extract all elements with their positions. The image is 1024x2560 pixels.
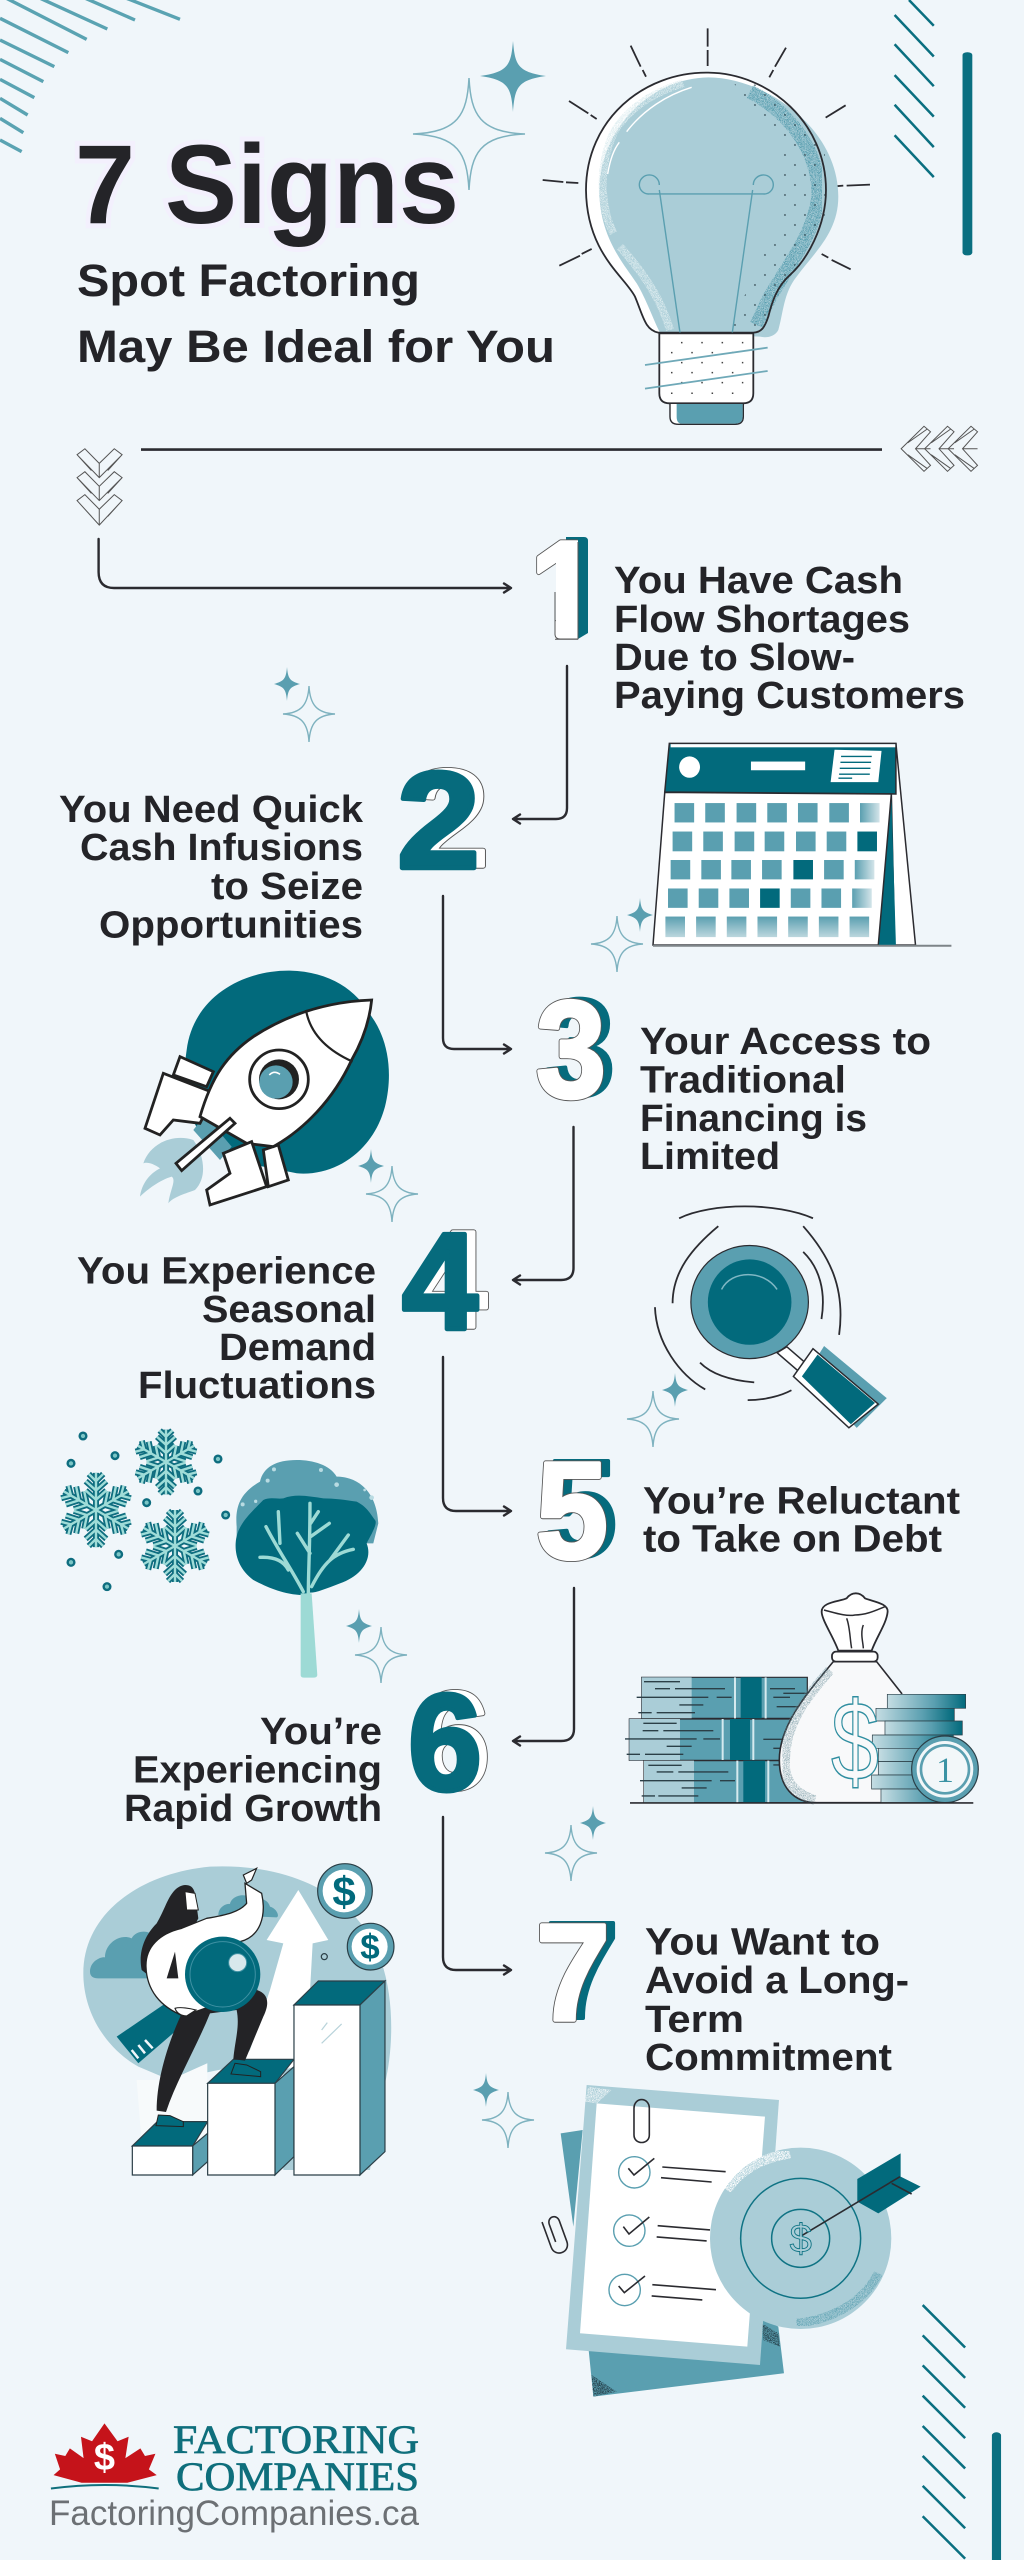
icon: money bag and cash	[625, 1593, 978, 1803]
number 4: 4	[411, 1203, 487, 1357]
item 4 text: Demand	[219, 1327, 376, 1369]
number 1: 1	[530, 513, 601, 667]
decorative stripes and bar: bottom right	[923, 2305, 1001, 2560]
sparkles: calendar	[591, 898, 653, 972]
number 6: 6	[408, 1666, 482, 1820]
item 4 text	[77, 1250, 376, 1407]
logo word: factoring: FACTORING	[173, 2417, 419, 2462]
item 7 text: Avoid a Long-	[645, 1960, 909, 2002]
item 4 text: You Experience	[77, 1250, 376, 1292]
number 2: 2	[397, 744, 480, 898]
item 4 text: Fluctuations	[138, 1365, 376, 1407]
number 7: 7	[545, 1894, 619, 2048]
icon: chevrons left	[77, 449, 122, 525]
coin dollar large: $	[332, 1868, 356, 1915]
sparkles: tree	[346, 1609, 407, 1683]
item 1 text: Paying Customers	[614, 675, 965, 717]
item 6 text: You’re	[260, 1711, 382, 1753]
number 3: 3	[545, 971, 615, 1125]
number 5: 5	[536, 1434, 608, 1588]
sparkles: growth	[545, 1806, 606, 1881]
coin dollar small: $	[360, 1928, 380, 1967]
number 2: 2	[406, 742, 489, 896]
item 6 text: Experiencing	[133, 1750, 382, 1792]
sparkles: rocket	[358, 1149, 418, 1222]
number 3: 3	[536, 973, 606, 1127]
icon: maple leaf	[51, 2423, 159, 2489]
icon: woman climbing growth bars	[83, 1864, 394, 2175]
icon: light bulb	[543, 28, 870, 424]
subheading line 1: Spot Factoring	[77, 255, 420, 306]
decorative stripes: top left	[0, 0, 180, 152]
logo	[49, 2417, 420, 2533]
number 6: 6	[416, 1664, 490, 1818]
subheading line 2: May Be Ideal for You	[77, 321, 555, 372]
filled sparkle	[480, 41, 546, 112]
bar 2	[208, 2059, 294, 2175]
bar 3	[294, 1981, 385, 2175]
number 7: 7	[536, 1896, 610, 2050]
item 2 text	[59, 789, 364, 946]
item 7 text: You Want to	[645, 1922, 880, 1964]
number 7: 7	[536, 1896, 610, 2050]
heading: 7 Signs: 7 Signs	[75, 122, 459, 247]
icon: snowflakes	[59, 1430, 229, 1590]
item 1 text: Due to Slow-	[614, 637, 855, 679]
item 6 text: Rapid Growth	[124, 1788, 382, 1830]
item 3 text: Traditional	[640, 1060, 846, 1102]
arrow: 5 to 6	[513, 1588, 574, 1746]
item 7 text	[645, 1922, 909, 2079]
number 4: 4	[402, 1205, 478, 1359]
sparkles: upper left	[274, 667, 335, 742]
leaf dollar sign: $	[94, 2437, 115, 2479]
target dollar sign: $	[790, 2217, 812, 2261]
cash stacks	[625, 1677, 807, 1803]
divider line	[141, 448, 882, 451]
item 3 text	[640, 1021, 931, 1178]
logo website: FactoringCompanies.ca	[49, 2494, 420, 2533]
money bag dollar sign: $	[831, 1679, 879, 1804]
item 2 text: to Seize	[211, 866, 363, 908]
icon: magnifying glass	[655, 1206, 887, 1428]
item 1 text	[614, 560, 965, 717]
item 4 text: Seasonal	[202, 1289, 376, 1331]
item 3 text: Your Access to	[640, 1021, 931, 1063]
arrow: 6 to 7	[443, 1817, 511, 1974]
bag	[779, 1593, 902, 1803]
item 5 text: You’re Reluctant	[643, 1481, 960, 1523]
snowflake bottom	[139, 1510, 211, 1582]
item 7 text: Commitment	[645, 2037, 892, 2079]
snowflake large	[59, 1473, 133, 1547]
item 3 text: Limited	[640, 1136, 780, 1178]
number 5: 5	[536, 1434, 608, 1588]
item 1 text: You Have Cash	[614, 560, 903, 602]
arrow: 2 to 3	[443, 896, 511, 1054]
woman	[141, 1868, 267, 2127]
arrow: 3 to 4	[513, 1127, 574, 1284]
icon: checklist and target	[542, 2085, 921, 2397]
number 2: 2	[406, 742, 489, 896]
number 1: 1	[530, 513, 601, 667]
item 7 text: Term	[645, 1999, 744, 2041]
arrow: 4 to 5	[443, 1357, 511, 1516]
item 5 text	[643, 1481, 960, 1561]
arrow: 1 to 2	[513, 666, 567, 824]
icon: chevrons right	[901, 426, 978, 471]
coin numeral: 1	[936, 1750, 954, 1790]
number 1	[536, 537, 588, 640]
snowflake top	[133, 1430, 199, 1494]
item 6 text	[124, 1711, 382, 1830]
icon: sparkles top	[413, 41, 546, 190]
item 5 text: to Take on Debt	[643, 1519, 942, 1561]
number 5: 5	[545, 1432, 617, 1586]
number 3: 3	[536, 973, 606, 1127]
logo word: companies: COMPANIES	[176, 2454, 419, 2499]
item 2 text: You Need Quick	[59, 789, 364, 831]
arrow: start to 1	[99, 539, 511, 592]
coin stacks	[872, 1694, 966, 1803]
snow dots	[68, 1433, 229, 1590]
number 4: 4	[411, 1203, 487, 1357]
outlined sparkle	[413, 78, 525, 190]
title	[75, 122, 555, 372]
number 6: 6	[416, 1664, 490, 1818]
sparkles: magnifier	[627, 1373, 688, 1447]
icon: tree	[236, 1460, 378, 1678]
icon: calendar	[653, 743, 951, 946]
item 2 text: Opportunities	[99, 904, 363, 946]
decorative stripes and bar: top right	[895, 0, 972, 255]
item 1 text: Flow Shortages	[614, 599, 910, 641]
item 3 text: Financing is	[640, 1098, 867, 1140]
bar 1	[132, 2122, 208, 2175]
item 2 text: Cash Infusions	[80, 827, 363, 869]
icon: rocket	[140, 971, 389, 1205]
dollar coins	[318, 1864, 394, 1970]
coin	[912, 1736, 978, 1803]
sparkles: checklist	[473, 2073, 534, 2148]
